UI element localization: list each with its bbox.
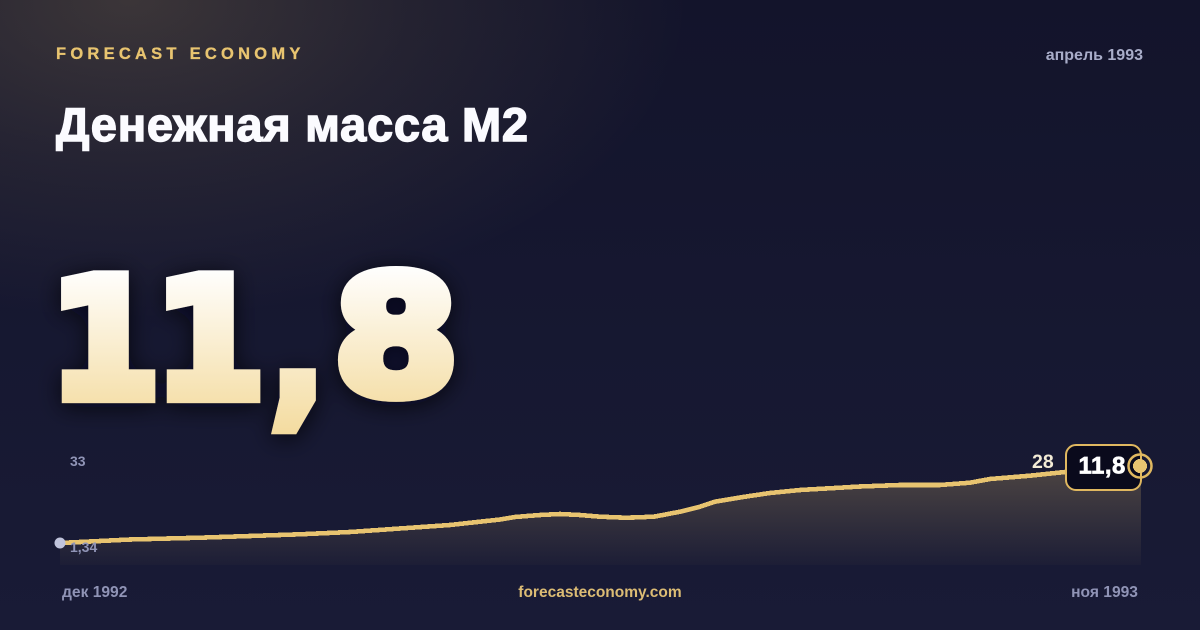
end marker (1128, 454, 1152, 478)
axis min label: 1,34 (70, 539, 97, 555)
title: Денежная масса М2 (56, 98, 529, 151)
chart: money supply area and line (54, 445, 1152, 565)
start date: дек 1992 (62, 584, 128, 601)
big value: , (271, 256, 324, 443)
big value: 8 (334, 243, 458, 433)
area fill (60, 472, 1141, 565)
date label: апрель 1993 (1046, 47, 1143, 64)
end date: ноя 1993 (1071, 584, 1138, 601)
website: forecasteconomy.com (518, 584, 682, 601)
big value: 1 (154, 245, 265, 437)
value callout (1066, 445, 1141, 490)
big value: 1 (49, 245, 160, 437)
start point (54, 538, 66, 548)
previous value label: 28 (1032, 451, 1054, 473)
value callout: 11,8 (1078, 452, 1126, 480)
brand label: FORECAST ECONOMY (56, 45, 305, 63)
axis max label: 33 (70, 453, 86, 469)
line (60, 472, 1065, 543)
big value (49, 243, 458, 443)
